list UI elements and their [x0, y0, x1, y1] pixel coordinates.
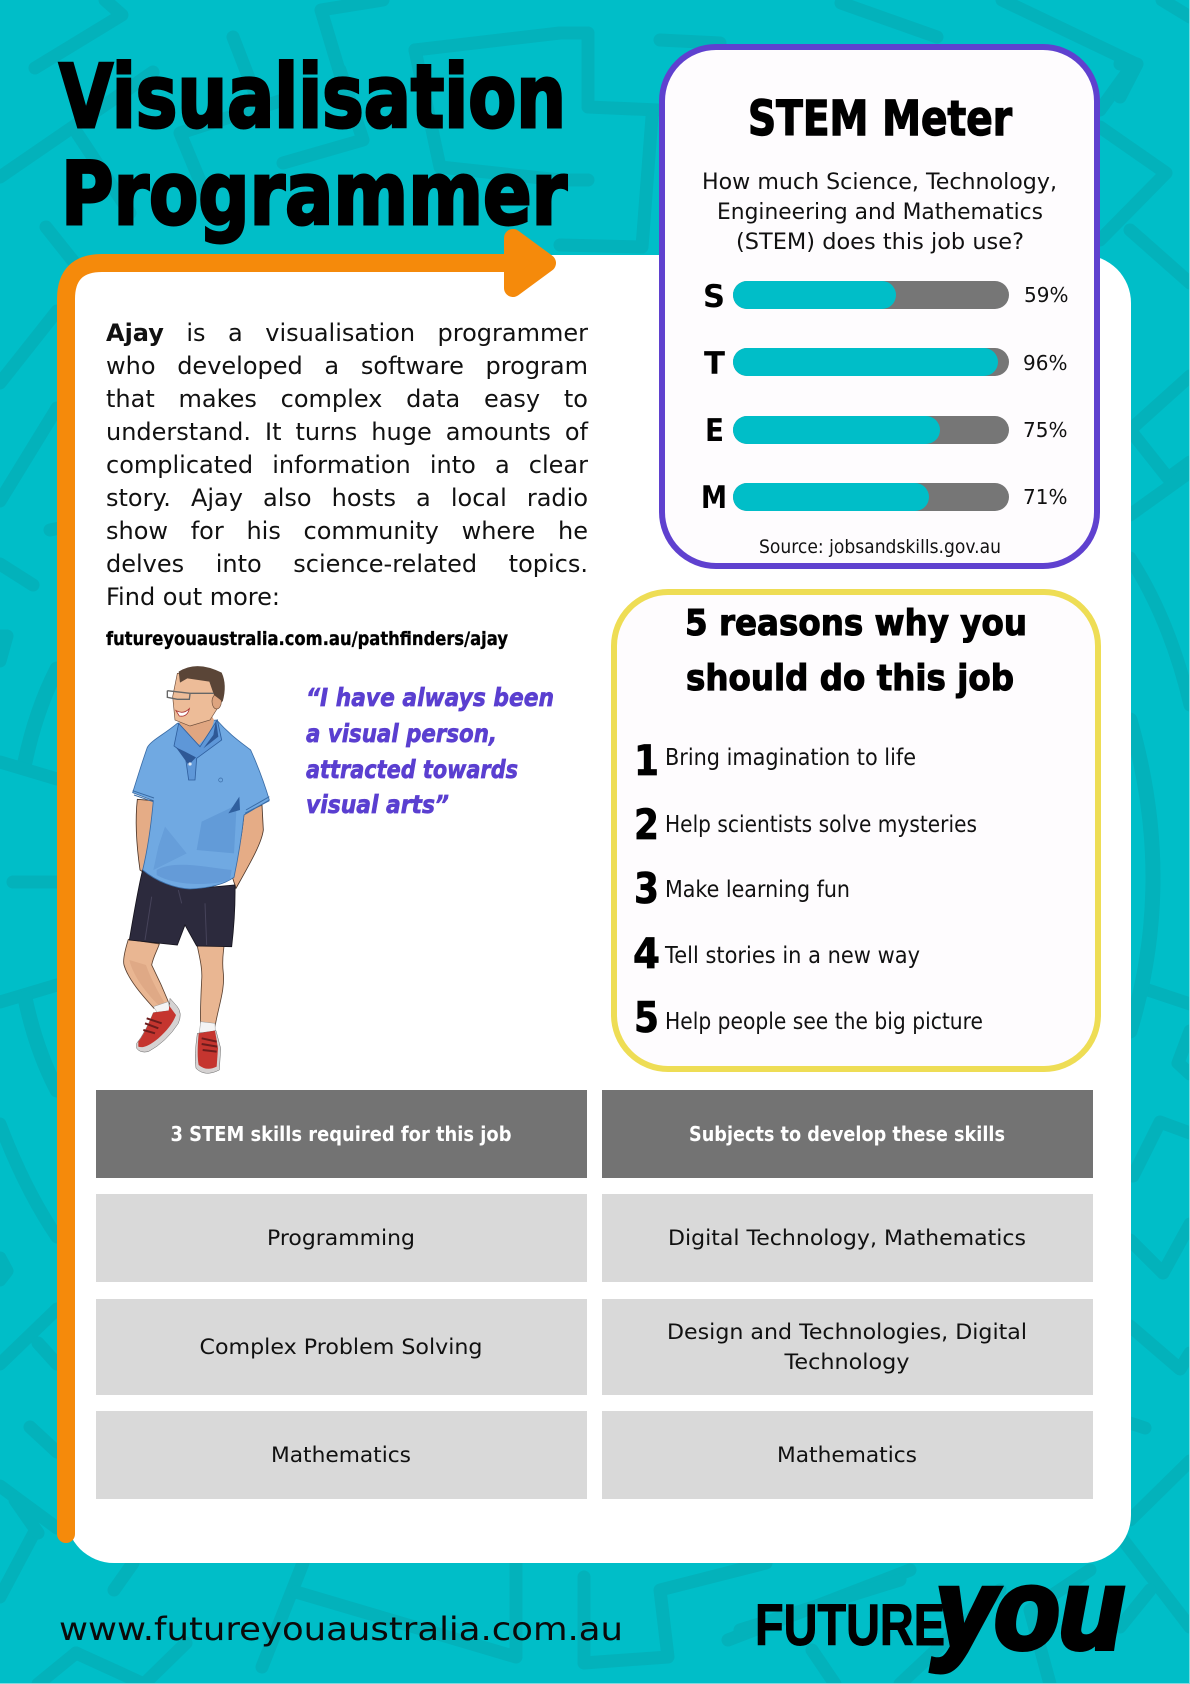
reason 5 — [634, 993, 983, 1042]
bar: Technology 96%: T — [704, 346, 725, 382]
row: Mathematics subject: Mathematics — [777, 1443, 917, 1467]
bar: Science 59%: S — [703, 279, 725, 315]
bar: Mathematics 71%: M — [701, 480, 727, 516]
text: pathfinder link: futureyouaustralia.com.au/pathfinders/ajay — [106, 628, 509, 650]
header: subjects — [602, 1090, 1093, 1178]
row: Mathematics: Mathematics — [271, 1443, 411, 1467]
reason 2: Help scientists solve mysteries — [665, 812, 977, 838]
row: Complex Problem Solving: Complex Problem Solving — [200, 1335, 482, 1359]
text: Ajay biography: that makes complex data easy to — [106, 385, 588, 413]
reason 4: 4 — [633, 929, 660, 978]
collar and neck — [179, 703, 214, 750]
reason 3 — [634, 864, 850, 913]
footer: website: www.futureyouaustralia.com.au — [59, 1610, 623, 1648]
row: Complex Problem Solving — [96, 1299, 587, 1395]
bar: Technology 96% — [704, 346, 1067, 382]
row: Digital Technology, Mathematics — [602, 1194, 1093, 1282]
heading: 5 reasons: should do this job — [686, 658, 1014, 699]
title: Programmer — [61, 143, 567, 245]
text: Ajay biography — [106, 319, 588, 611]
text: Ajay biography: story. Ajay also hosts a local radio — [106, 484, 588, 512]
panel: main white background — [66, 255, 1131, 1563]
quote: visual arts” — [306, 790, 449, 819]
reason 5: Help people see the big picture — [665, 1009, 983, 1035]
quote: “I have always been — [306, 683, 554, 712]
text: Ajay biography: delves into science-related topics. — [106, 550, 588, 578]
panel: 5 reasons — [614, 592, 1098, 1069]
title: Visualisation — [59, 46, 566, 148]
row: Programming — [96, 1194, 587, 1282]
reason 2 — [634, 800, 977, 849]
header: skills: 3 STEM skills required for this job — [170, 1122, 512, 1146]
table: skills and subjects — [96, 1090, 1093, 1499]
illustration: Ajay — [124, 666, 269, 1073]
row: Programming: Programming — [267, 1226, 415, 1250]
quote: a visual person, — [306, 719, 497, 748]
text: Ajay biography: Find out more: — [106, 583, 280, 611]
text: STEM question: How much Science, Technology, — [702, 170, 1057, 195]
row: Design and Technologies, Digital Technology: Design and Technologies, Digital — [667, 1320, 1027, 1344]
head — [173, 673, 223, 726]
text: Ajay biography: who developed a software program — [106, 352, 588, 380]
bar: Mathematics 71% — [701, 480, 1067, 516]
text: STEM question: (STEM) does this job use? — [736, 230, 1024, 255]
logo: FutureYou: you — [931, 1547, 1124, 1672]
bar: Engineering 75% — [705, 413, 1067, 449]
reason 1: 1 — [634, 736, 659, 785]
reason 5: 5 — [634, 993, 659, 1042]
text: STEM question — [702, 170, 1057, 255]
row: Digital Technology, Mathematics: Digital Technology, Mathematics — [668, 1226, 1026, 1250]
bar: Science 59%: 59% — [1024, 283, 1068, 307]
arrow: orange pathway arrow — [66, 238, 547, 1534]
heading: STEM Meter: STEM Meter — [748, 91, 1012, 147]
header: skills — [96, 1090, 587, 1178]
row: Mathematics subject — [602, 1411, 1093, 1499]
text: source: Source: jobsandskills.gov.au — [759, 536, 1001, 558]
right shoe — [195, 1031, 221, 1073]
reason 4 — [633, 929, 920, 978]
heading: 5 reasons — [685, 603, 1027, 699]
row: Design and Technologies, Digital Technology — [602, 1299, 1093, 1395]
socks — [153, 1002, 170, 1014]
left leg — [124, 939, 169, 1008]
reason 2: 2 — [634, 800, 659, 849]
text: Ajay biography: complicated information into a clear — [106, 451, 588, 479]
panel: STEM meter — [662, 47, 1097, 566]
quote — [306, 683, 554, 819]
right arm — [232, 805, 263, 888]
shorts — [129, 870, 235, 947]
text: Ajay biography: understand. It turns huge amounts of — [106, 418, 588, 446]
header: subjects: Subjects to develop these skills — [689, 1122, 1005, 1146]
text: Ajay biography: Ajay is a visualisation programmer — [106, 319, 588, 347]
reason 1 — [634, 736, 916, 785]
left shoe — [137, 998, 180, 1052]
left arm — [136, 799, 154, 873]
reason 4: Tell stories in a new way — [664, 943, 920, 969]
text: Ajay biography: show for his community where he — [106, 517, 588, 545]
heading: 5 reasons: 5 reasons why you — [685, 603, 1027, 644]
right leg — [197, 946, 224, 1027]
bar: Mathematics 71%: 71% — [1023, 485, 1067, 509]
bar: Engineering 75%: E — [705, 413, 724, 449]
quote: attracted towards — [306, 755, 518, 784]
row: Mathematics — [96, 1411, 587, 1499]
reason 1: Bring imagination to life — [665, 745, 916, 771]
title — [59, 46, 567, 245]
text: STEM question: Engineering and Mathematics — [717, 200, 1043, 225]
logo: FutureYou — [755, 1547, 1124, 1672]
reason 3: Make learning fun — [665, 877, 850, 903]
bar: Science 59% — [703, 279, 1068, 315]
reason 3: 3 — [634, 864, 659, 913]
bar: Engineering 75%: 75% — [1023, 418, 1067, 442]
row: Design and Technologies, Digital Technology: Technology — [783, 1350, 910, 1374]
logo: FutureYou: FUTURE — [755, 1593, 945, 1658]
shirt — [133, 720, 269, 889]
bar: Technology 96%: 96% — [1023, 351, 1067, 375]
